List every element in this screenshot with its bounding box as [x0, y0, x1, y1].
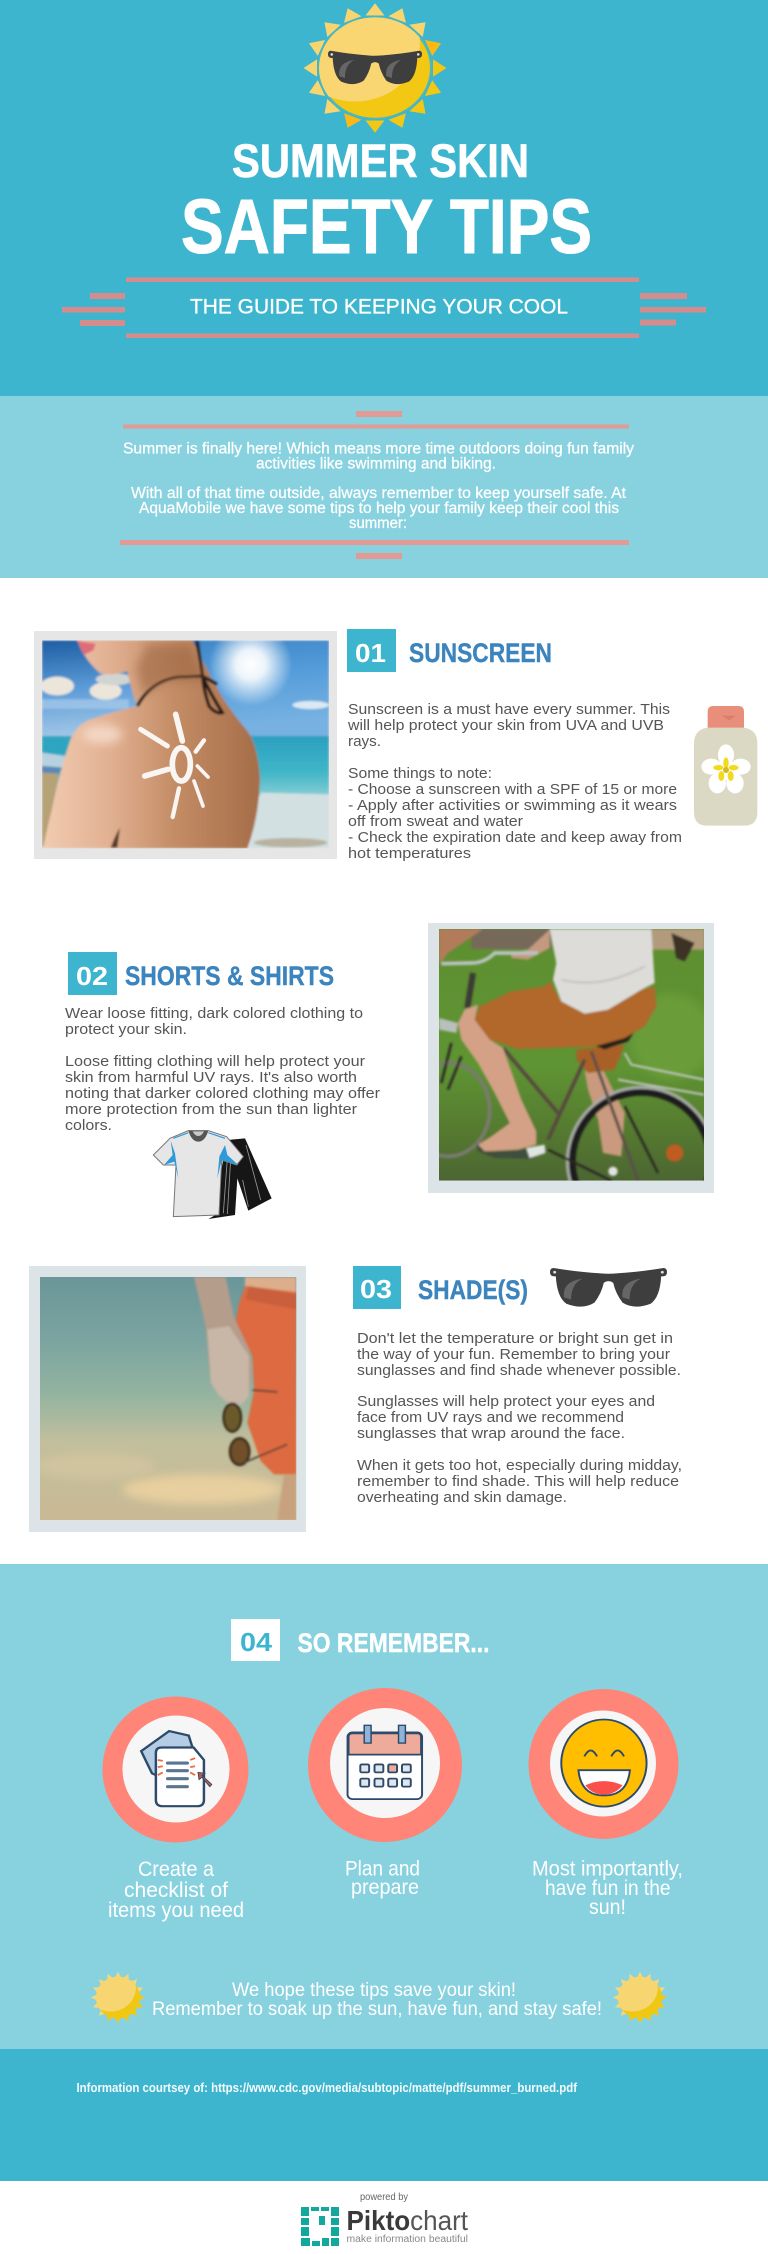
panel: 02 shorts and shirts — [65, 923, 715, 1235]
title line 1: SUMMER SKIN — [232, 134, 529, 187]
text: most importantly: sun! — [589, 1895, 626, 1919]
subtitle: THE GUIDE TO KEEPING YOUR COOL — [190, 296, 568, 318]
title line 2: SAFETY TIPS — [181, 184, 592, 270]
sunscreen body text: will help protect your skin from UVA and UVB — [347, 717, 664, 734]
sunscreen body text: - Check the expiration date and keep away from — [348, 829, 682, 846]
shade body text — [357, 1330, 682, 1506]
sunscreen body text: rays. — [348, 733, 381, 750]
icon: piktochart logo — [301, 2207, 339, 2246]
shade body text: Sunglasses will help protect your eyes and — [357, 1393, 655, 1410]
number badge 03 — [353, 1266, 401, 1309]
text: plan and prepare: Plan and — [345, 1856, 420, 1880]
sunscreen body text: - Choose a sunscreen with a SPF of 15 or more — [348, 781, 677, 798]
text: checklist: Create a — [138, 1857, 214, 1881]
number badge 04 — [231, 1619, 280, 1661]
sunscreen body text: off from sweat and water — [348, 813, 523, 830]
icon: sun with sunglasses — [304, 3, 446, 133]
heading: sunscreen: SUNSCREEN — [409, 638, 552, 668]
text: plan and prepare — [345, 1856, 420, 1899]
number badge 01: 01 — [355, 638, 386, 668]
number badge 02: 02 — [76, 961, 108, 991]
text: most importantly: have fun in the — [545, 1876, 670, 1900]
closing message — [152, 1980, 602, 2020]
text: most importantly — [532, 1856, 683, 1919]
shade body text: sunglasses and find shade whenever possible. — [357, 1362, 681, 1379]
intro text: Summer is finally here! Which means more time outdoors doing fun family — [123, 440, 634, 458]
sunscreen body text: hot temperatures — [348, 845, 471, 862]
source text: Information courtsey of: https://www.cdc.gov/media/subtopic/matte/pdf/summer_burned.pdf — [76, 2081, 578, 2095]
heading: so remember: SO REMEMBER... — [298, 1628, 490, 1658]
panel: footer source — [0, 2049, 768, 2181]
intro text: activities like swimming and biking. — [256, 456, 496, 472]
icon: smiley — [528, 1689, 678, 1839]
photo: hand holding sunglasses — [29, 1266, 306, 1532]
sunscreen body text: Some things to note: — [348, 765, 492, 782]
number badge 01 — [347, 629, 396, 672]
photo: sun drawn in sunscreen on back — [34, 623, 337, 859]
intro text — [123, 440, 634, 532]
shade body text: When it gets too hot, especially during midday, — [357, 1457, 682, 1474]
intro text: With all of that time outside, always remember to keep yourself safe. At — [131, 485, 627, 502]
shade body text: the way of your fun. Remember to bring your — [357, 1346, 670, 1363]
icon: checklist — [102, 1696, 248, 1842]
icon: small sun left — [91, 1972, 145, 2024]
text: checklist: checklist of — [124, 1878, 228, 1902]
banner rules — [62, 278, 706, 338]
text: checklist — [108, 1857, 244, 1922]
panel: 04 so remember — [0, 1564, 768, 2049]
shade body text: remember to find shade. This will help reduce — [357, 1473, 679, 1490]
closing message: We hope these tips save your skin! — [232, 1980, 516, 2001]
intro text: summer: — [349, 515, 407, 532]
photo: cyclist in shorts — [428, 923, 714, 1193]
panel: piktochart branding — [301, 2192, 468, 2246]
clothing body text: noting that darker colored clothing may offer — [65, 1085, 380, 1102]
sunscreen body text: - Apply after activities or swimming as it wears — [348, 797, 677, 814]
shade body text: overheating and skin damage. — [357, 1489, 567, 1506]
clothing body text — [65, 1005, 380, 1134]
clothing body text: skin from harmful UV rays. It's also worth — [65, 1069, 357, 1086]
heading: shades: SHADE(S) — [418, 1275, 528, 1305]
sunscreen body text — [347, 701, 682, 862]
text: most importantly: Most importantly, — [532, 1856, 683, 1880]
clothing body text: Loose fitting clothing will help protect your — [65, 1053, 365, 1070]
number badge 02 — [68, 952, 117, 995]
piktochart wordmark: Piktochart — [346, 2205, 468, 2236]
number badge 04: 04 — [240, 1627, 273, 1657]
icon: sunscreen bottle — [694, 706, 757, 826]
text: checklist: items you need — [108, 1898, 244, 1922]
clothing body text: more protection from the sun than lighter — [65, 1101, 357, 1118]
closing message: Remember to soak up the sun, have fun, and stay safe! — [152, 1999, 602, 2020]
piktochart tagline: make information beautiful — [346, 2234, 468, 2245]
icon: small sun right — [613, 1972, 667, 2024]
clothing body text: Wear loose fitting, dark colored clothing to — [65, 1005, 363, 1022]
icon: calendar — [308, 1688, 462, 1842]
panel: 01 sunscreen — [34, 623, 757, 862]
shade body text: Don't let the temperature or bright sun get in — [357, 1330, 673, 1347]
shade body text: sunglasses that wrap around the face. — [357, 1425, 625, 1442]
icon: sunglasses — [550, 1268, 667, 1307]
heading: shorts and shirts: SHORTS & SHIRTS — [125, 961, 334, 991]
intro text: AquaMobile we have some tips to help your family keep their cool this — [139, 500, 619, 517]
clothing body text: protect your skin. — [65, 1021, 187, 1038]
panel: introduction — [0, 396, 768, 578]
sunscreen body text: Sunscreen is a must have every summer. This — [348, 701, 670, 718]
panel: 03 shades — [29, 1266, 682, 1532]
number badge 03: 03 — [360, 1274, 392, 1304]
text: plan and prepare: prepare — [351, 1875, 419, 1899]
powered by: powered by — [360, 2192, 408, 2203]
panel: header — [0, 0, 768, 396]
clothing body text: colors. — [65, 1117, 112, 1134]
shade body text: face from UV rays and we recommend — [357, 1409, 624, 1426]
icon: shirt and shorts — [153, 1131, 272, 1219]
